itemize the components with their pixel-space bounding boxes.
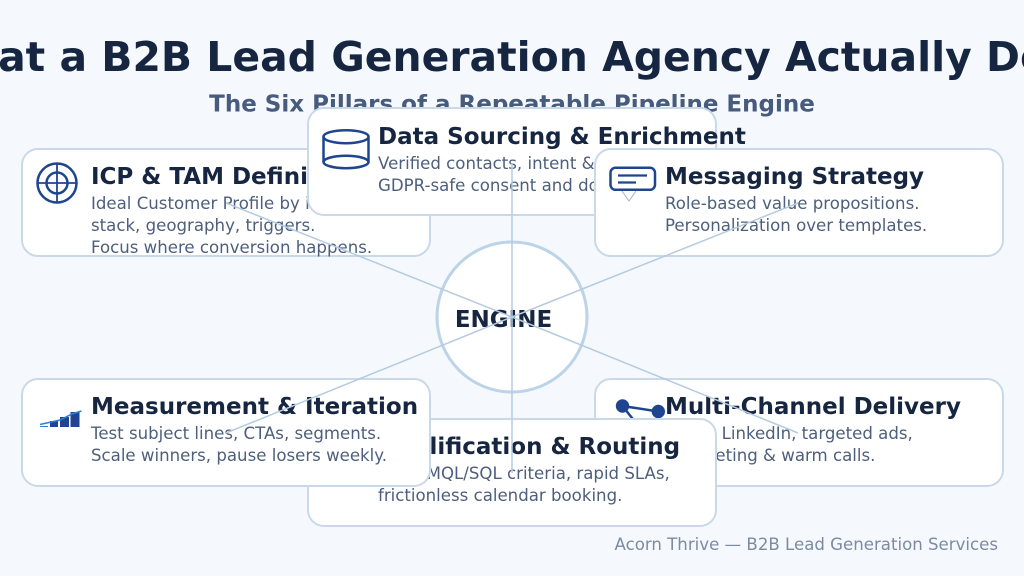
panel: ICP and TAM definition: [22, 149, 463, 257]
text: qualification description: frictionless calendar booking.: [378, 486, 622, 505]
panel: measurement and iteration: [22, 379, 430, 486]
heading: ICP: ICP & TAM Definition: [91, 164, 359, 190]
text: qualification description: Clear MQL/SQL criteria, rapid SLAs,: [378, 464, 670, 483]
text: data description: GDPR-safe consent and documentation.: [378, 176, 709, 195]
heading: multi-channel: Multi-Channel Delivery: [665, 394, 961, 420]
icon: database cylinder: [324, 130, 368, 168]
text: ICP description: stack, geography, triggers.: [91, 216, 315, 235]
text: multi-channel description: Email, LinkedIn, targeted ads,: [665, 424, 913, 443]
icon: speech bubble: [610, 168, 655, 201]
heading: qualification: Qualification & Routing: [378, 434, 680, 460]
text: multi-channel description: retargeting & warm calls.: [665, 446, 875, 465]
subtitle: The Six Pillars of a Repeatable Pipeline Engine: [209, 92, 815, 118]
icon: connected nodes: [616, 399, 665, 428]
text: measurement description: Scale winners, pause losers weekly.: [91, 446, 387, 465]
central engine hub: [437, 242, 587, 392]
panel: lead qualification and routing: [308, 419, 716, 526]
text: data description: Verified contacts, intent & technographics.: [378, 154, 733, 173]
text: ICP description: Focus where conversion happens.: [91, 238, 372, 257]
text: ICP description: Ideal Customer Profile by industry, size, tech: [91, 194, 463, 213]
heading: measurement: Measurement & Iteration: [91, 394, 418, 420]
connector lines: [226, 163, 798, 473]
heading: messaging: Messaging Strategy: [665, 164, 924, 190]
icon: rising bar chart: [40, 411, 82, 427]
text: measurement description: Test subject lines, CTAs, segments.: [90, 424, 381, 443]
footer credit: Acorn Thrive — B2B Lead Generation Services: [615, 535, 998, 554]
text: messaging description: Personalization over templates.: [665, 216, 927, 235]
heading: data: Data Sourcing & Enrichment: [378, 124, 746, 150]
panel: multi-channel delivery: [595, 379, 1003, 486]
icon: target: [37, 163, 77, 203]
central engine hub: ENGINE: [455, 307, 552, 333]
text: messaging description: Role-based value propositions.: [665, 194, 920, 213]
panel: data sourcing and enrichment: [308, 108, 746, 215]
panel: messaging strategy: [595, 149, 1003, 256]
